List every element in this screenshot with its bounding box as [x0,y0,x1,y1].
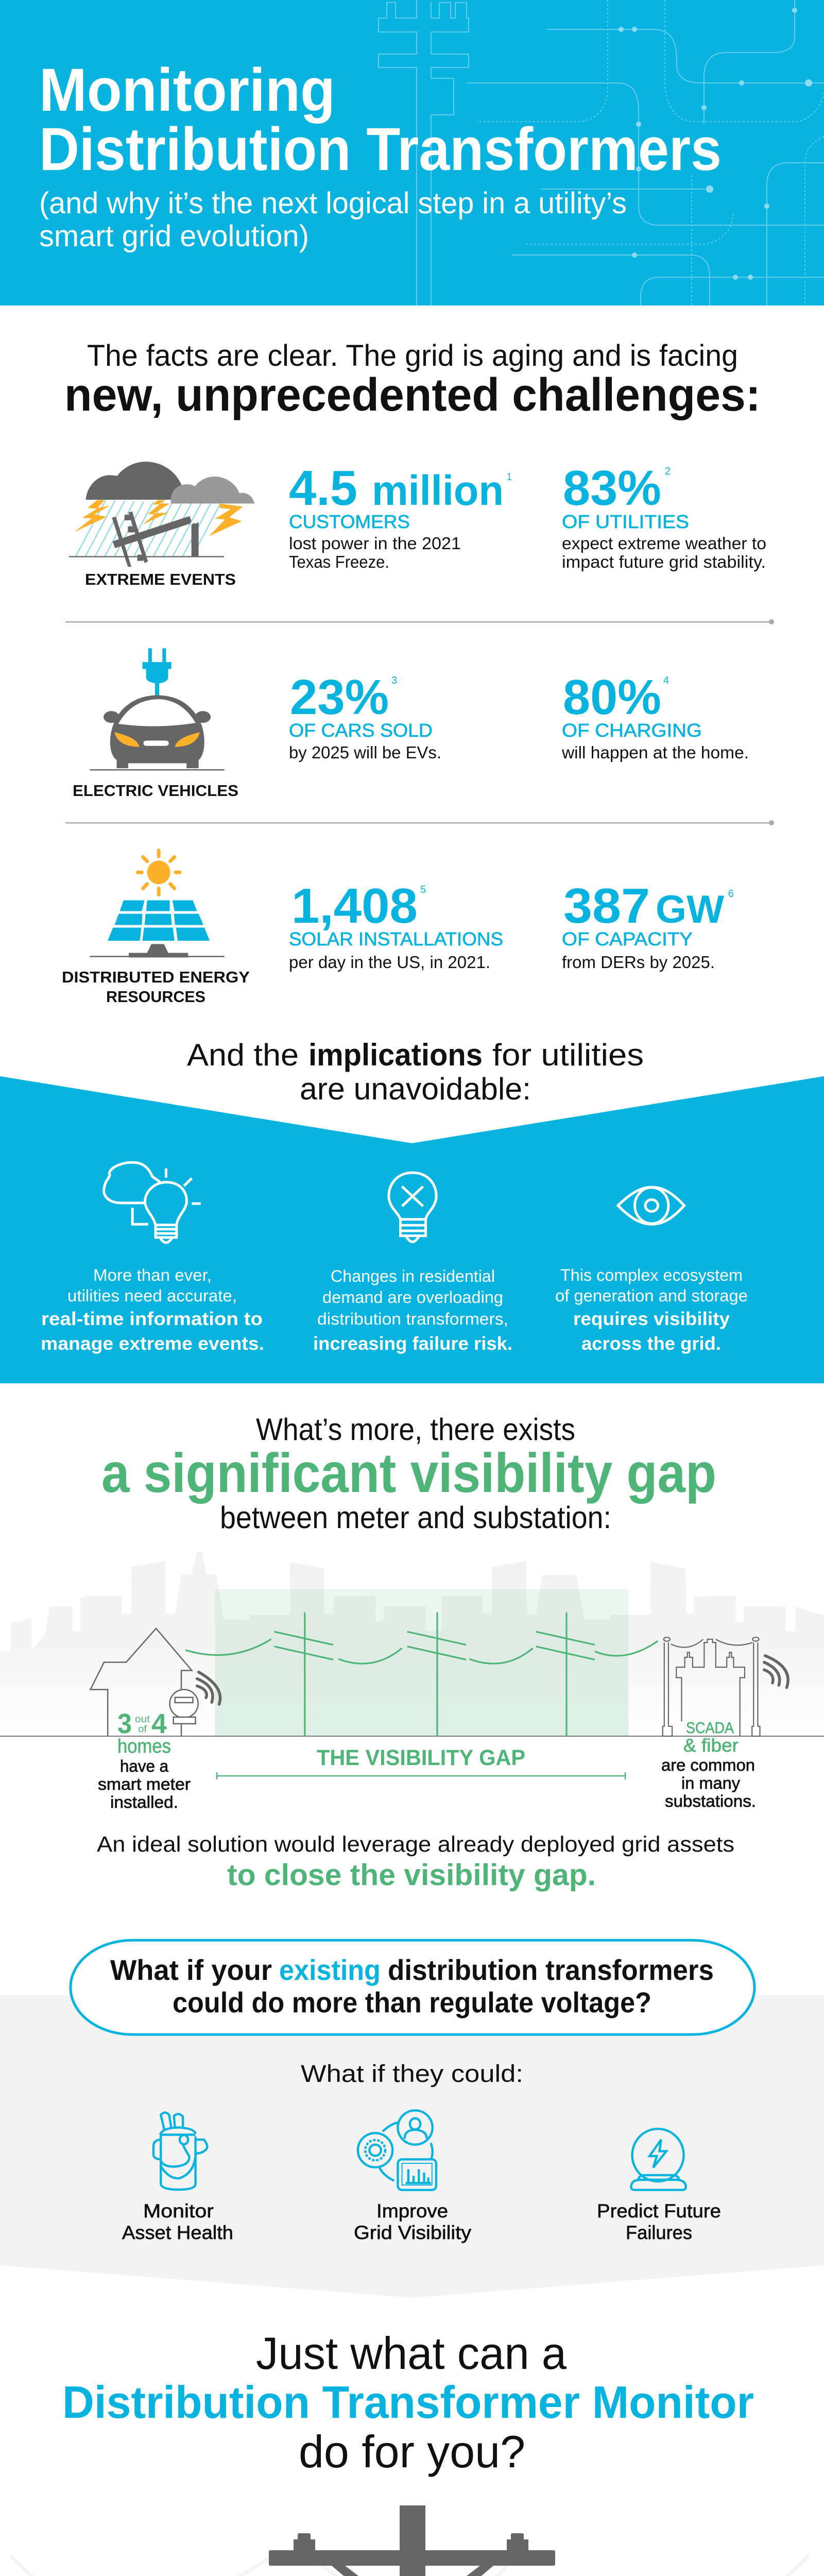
panel: improve grid visibility [354,2110,472,2243]
icon: electric car [90,648,225,771]
stat: 3 out of 4 homes: of [138,1724,147,1735]
stat: SCADA and fiber: & fiber [683,1735,739,1756]
stat: 1,408 solar installations: 1,408 [291,878,418,934]
stat: 4.5 million customers: million [372,467,504,514]
stat: SCADA and fiber: in many [681,1774,740,1792]
stat: 83% of utilities: 2 [665,466,671,477]
stat: SCADA and fiber: substations. [665,1792,756,1810]
text: overloading transformers: Changes in residential [331,1267,495,1285]
text: real-time information [41,1266,264,1354]
stat: 80% of charging [561,670,749,762]
label: EXTREME EVENTS [85,570,236,588]
text: overloading transformers [313,1267,512,1354]
panel: grey background [0,1995,824,2298]
stat: 80% of charging: 4 [663,675,669,686]
label [597,2200,721,2243]
stat: 23% of cars sold: OF CARS SOLD [289,720,433,741]
title: Distribution Transformers [39,115,722,183]
icon: cloud and bulb [104,1162,201,1243]
panel: electric vehicles [73,648,749,800]
skyline [0,1551,824,1736]
heading: challenges: new, unprecedented challenges: [64,369,761,421]
stat: 3 out of 4 homes: homes [117,1736,171,1757]
callout: what if: existing [279,1954,381,1986]
label: Asset Health [122,2222,233,2243]
stat: 1,408 solar installations: per day in the US, in 2021. [289,953,490,972]
stat: 4.5 million customers: Texas Freeze. [289,552,389,571]
title: Monitoring [39,56,335,124]
icon: connected data [358,2110,436,2190]
panel: distributed energy resources [62,851,734,1006]
heading: implications [187,1038,644,1106]
callout: what if: distribution transformers [388,1954,714,1986]
heading: challenges: The facts are clear. The grid is aging and is facing [87,339,738,372]
stat: 1,408 solar installations: SOLAR INSTALLATIONS [289,928,503,950]
panel: monitor asset health [122,2112,233,2243]
text: real-time information: real-time information to [41,1308,263,1329]
heading: implications: for utilities [492,1038,644,1072]
stat: 3 out of 4 homes: out [135,1714,150,1725]
text: overloading transformers: distribution transformers, [317,1310,508,1328]
text: ideal solution [97,1832,734,1892]
stat: 387 GW of capacity: GW [656,888,724,931]
subtitle [39,187,627,253]
subtitle: smart grid evolution) [39,219,309,253]
diagram: visibility gap [0,1551,824,1811]
stat: 387 GW of capacity: from DERs by 2025. [562,953,715,972]
icon: overloaded bulb [389,1173,436,1242]
label [122,2200,233,2243]
hero banner [0,0,824,306]
callout: what if: could do more than regulate voltage? [173,1986,651,2019]
icon: storm and broken pole [69,462,254,567]
panel: extreme events [69,461,766,588]
ground line [0,1736,824,1737]
text: overloading transformers: increasing failure risk. [313,1333,512,1354]
stat: 80% of charging: will happen at the home. [561,743,749,762]
label: ELECTRIC VEHICLES [73,782,238,800]
stat: 83% of utilities: expect extreme weather to [562,534,766,553]
callout: what if: What if your [110,1954,272,1986]
text: real-time information: manage extreme events. [41,1333,264,1354]
label: Grid Visibility [354,2222,472,2243]
stat: 387 GW of capacity: 387 [563,878,650,934]
stat: 387 GW of capacity: OF CAPACITY [562,928,693,950]
stat: 4.5 million customers: 4.5 [289,461,357,516]
stat: 3 out of 4 homes [98,1708,191,1811]
label: Failures [626,2222,692,2243]
text: visibility across the grid: of generation and storage [555,1286,748,1305]
label [62,968,250,1006]
stat: 83% of utilities: OF UTILITIES [562,511,689,532]
stat: 387 GW of capacity [562,878,734,972]
icon: crystal ball [631,2129,686,2190]
gap label and bracket [217,1745,625,1780]
stat: SCADA and fiber: SCADA [686,1719,734,1737]
label: DISTRIBUTED ENERGY [62,968,250,986]
gap label and bracket: THE VISIBILITY GAP [317,1745,525,1770]
stat: 1,408 solar installations: 5 [420,884,426,895]
label: Predict Future [597,2200,721,2222]
stat: 4.5 million customers: lost power in the 2021 [289,534,461,553]
stat: 80% of charging: 80% [563,670,661,725]
stat: 387 GW of capacity: 6 [728,888,734,900]
stat: 4.5 million customers: 1 [507,471,512,483]
icon: eye [618,1187,684,1224]
home with smart meter [91,1629,198,1736]
stat: 23% of cars sold: by 2025 will be EVs. [289,743,441,762]
panel: predict future failures [597,2129,721,2243]
text: ideal solution: to close the visibility gap. [227,1858,596,1892]
stat: 83% of utilities [562,461,766,571]
stat: 23% of cars sold: 3 [391,675,397,686]
stat: 83% of utilities: impact future grid stability. [562,552,766,571]
poles and wires [185,1612,658,1736]
label [354,2200,472,2243]
heading: implications: implications [308,1038,483,1072]
icon: solar panel and sun [90,851,225,957]
visibility gap zone [215,1589,628,1736]
text: real-time information: More than ever, [93,1266,212,1284]
heading: what can a monitor do [62,2328,754,2477]
heading: visibility gap: What’s more, there exists [256,1412,575,1447]
stat: 3 out of 4 homes: smart meter [98,1775,191,1793]
stat: 3 out of 4 homes: installed. [110,1793,178,1811]
heading: visibility gap: a significant visibility gap [101,1442,716,1504]
background: faint wires and trees [0,2555,824,2576]
text: visibility across the grid [555,1266,748,1354]
heading: visibility gap: between meter and substation: [220,1500,611,1535]
text: ideal solution: An ideal solution would leverage already deployed grid assets [97,1832,734,1857]
stat: 3 out of 4 homes: have a [120,1757,168,1775]
stat: 3 out of 4 homes: 4 [151,1708,167,1739]
stat: 23% of cars sold: 23% [290,670,389,725]
title [39,56,722,183]
stat: 3 out of 4 homes: 3 [117,1708,132,1739]
heading: what can a monitor do: do for you? [299,2426,525,2477]
stat: 4.5 million customers: CUSTOMERS [289,511,410,532]
text: real-time information: utilities need accurate, [67,1286,237,1305]
transformer outline pattern [379,0,824,306]
heading: what can a monitor do: Distribution Transformer Monitor [62,2377,754,2428]
heading: what if they could: What if they could: [301,2060,523,2087]
label: Monitor [143,2200,214,2222]
subtitle: (and why it’s the next logical step in a utility’s [39,187,627,220]
panel: implications [0,1076,824,1383]
heading: implications: And the [187,1038,299,1072]
text: visibility across the grid: across the grid. [581,1333,721,1354]
stat: 4.5 million customers [289,461,512,571]
text: visibility across the grid: This complex ecosystem [560,1266,743,1284]
callout: what if [71,1940,754,2035]
icon: transformer with bulb [153,2112,207,2190]
stat: SCADA and fiber: are common [661,1756,755,1774]
heading: what can a monitor do: Just what can a [256,2328,566,2379]
illustration: utility pole [269,2505,555,2576]
heading: visibility gap [101,1412,716,1535]
stat: SCADA and fiber [661,1719,756,1810]
stat: 80% of charging: OF CHARGING [562,720,702,741]
text: visibility across the grid: requires visibility [573,1308,730,1329]
stat: 1,408 solar installations [289,878,503,972]
stat: 83% of utilities: 83% [563,461,661,516]
heading: challenges [64,339,761,421]
substation [663,1637,760,1736]
heading: implications: are unavoidable: [300,1072,531,1106]
text: overloading transformers: demand are overloading [322,1288,503,1307]
label: Improve [376,2200,448,2222]
label: RESOURCES [106,988,205,1006]
stat: 23% of cars sold [289,670,441,762]
